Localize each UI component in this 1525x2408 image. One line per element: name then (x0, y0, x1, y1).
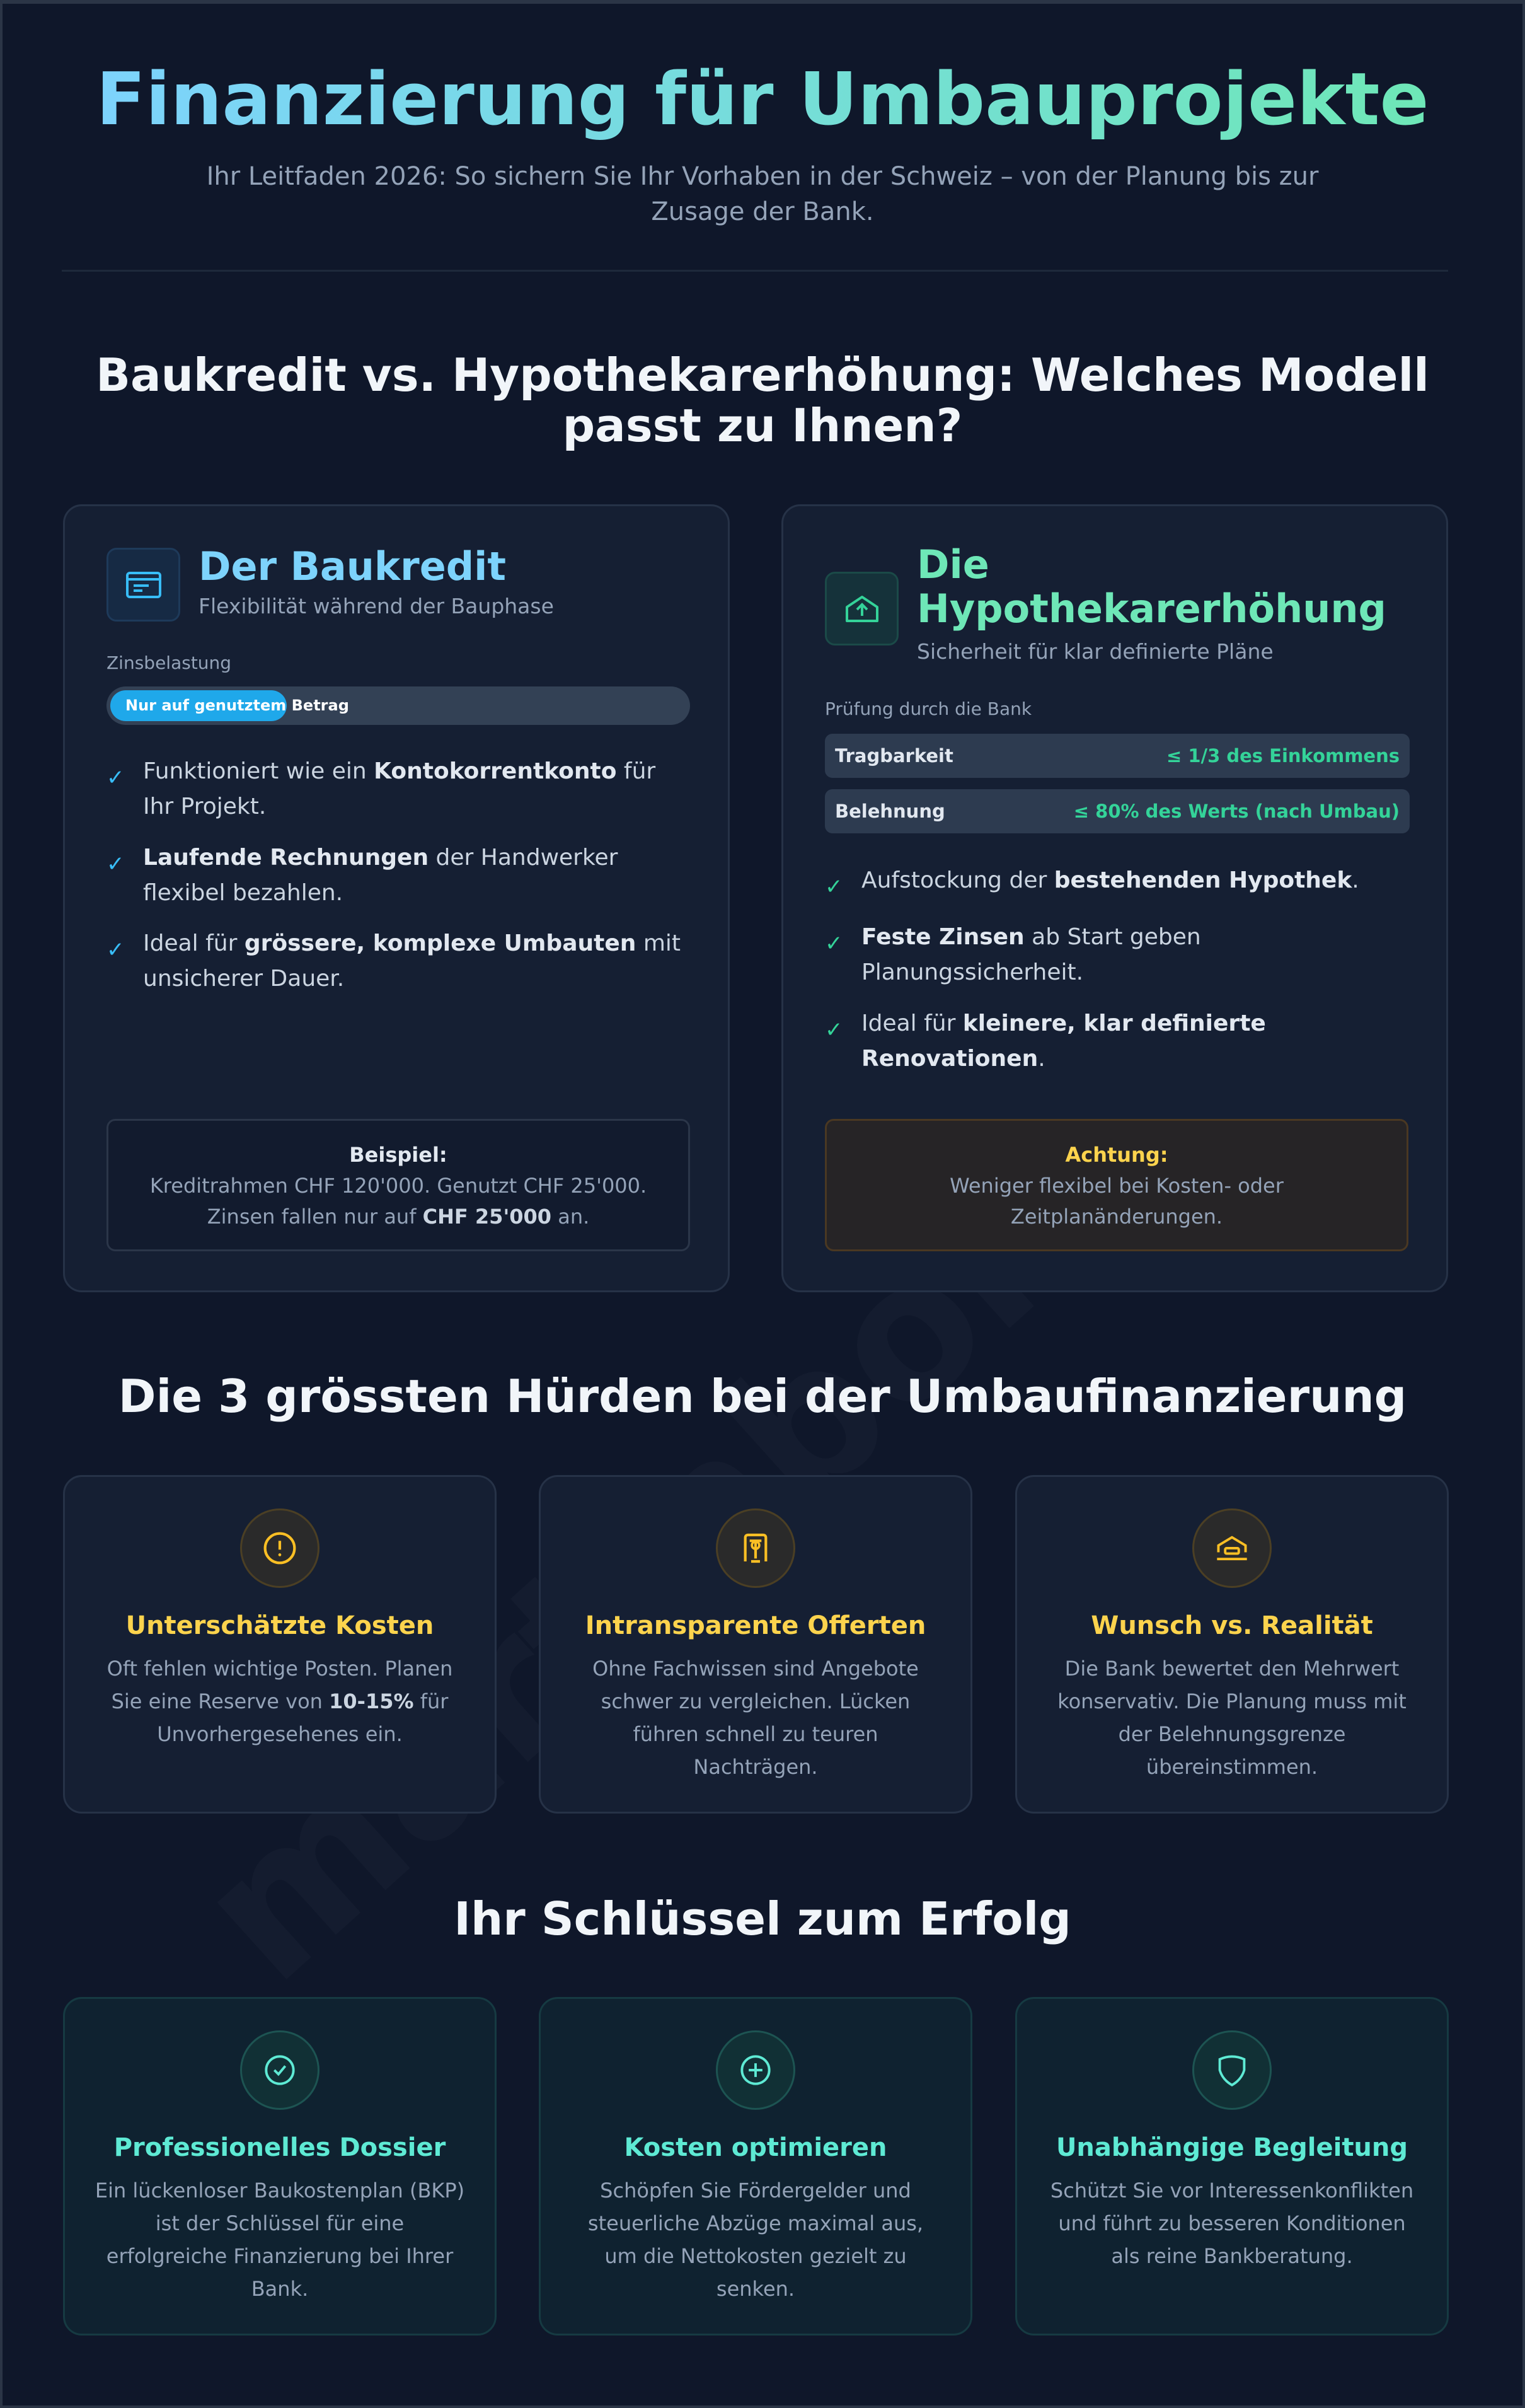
panel: Kosten optimieren: steuerliche Abzüge maximal aus, (588, 2211, 923, 2235)
panel: Wunsch vs. Realität: konservativ. Die Planung muss mit (1057, 1689, 1407, 1713)
panel: Baukredit: Ideal für grössere, komplexe Umbauten mit (143, 930, 681, 956)
panel: Unabhängige Begleitung: Schützt Sie vor Interessenkonflikten (1050, 2179, 1413, 2203)
bullets: Ihr Projekt. (143, 794, 266, 819)
panel: Wunsch vs. Realität: Wunsch vs. Realität (1091, 1611, 1373, 1640)
panel: Baukredit: ✓ (106, 852, 125, 877)
panel: Intransparente Offerten (539, 1475, 972, 1814)
panel: Hypothekarerhöhung: Feste Zinsen ab Start geben (861, 924, 1201, 950)
panel: Hypothekarerhöhung: Prüfung durch die Bank (825, 698, 1032, 719)
panel: Intransparente Offerten: führen schnell zu teuren (633, 1722, 878, 1746)
panel: Baukredit (63, 504, 730, 1292)
panel: Unterschätzte Kosten: Sie eine Reserve von 10-15% für (112, 1689, 448, 1713)
icon: alert (240, 1508, 319, 1588)
panel: Kosten optimieren: Kosten optimieren (624, 2133, 887, 2162)
row: Tragbarkeit (825, 734, 1410, 778)
panel: Professionelles Dossier: Ein lückenloser Baukostenplan (BKP) (95, 2179, 464, 2203)
bullets (106, 758, 655, 819)
bar: Zinsbelastung: Nur auf genutztem Betrag (125, 697, 349, 714)
panel: Unabhängige Begleitung: als reine Bankberatung. (1111, 2244, 1353, 2268)
panel: Hypothekarerhöhung: Planungssicherheit. (861, 959, 1083, 985)
panel: Hypothekarerhöhung: ✓ (825, 874, 843, 900)
callout: Beispiel: Zinsen fallen nur auf CHF 25'000 an. (207, 1205, 589, 1229)
panel: Intransparente Offerten: schwer zu vergleichen. Lücken (601, 1689, 910, 1713)
icon: upload house (825, 572, 899, 645)
panel: Professionelles Dossier: erfolgreiche Finanzierung bei Ihrer (106, 2244, 453, 2268)
row: Belehnung: ≤ 80% des Werts (nach Umbau) (1074, 801, 1400, 822)
icon: house (1192, 1508, 1272, 1588)
subtitle: Ihr Leitfaden 2026: So sichern Sie Ihr Vorhaben in der Schweiz – von der Planung bis zur (207, 162, 1318, 191)
panel: Intransparente Offerten: Ohne Fachwissen sind Angebote (592, 1657, 919, 1681)
heading: Schlüssel: Ihr Schlüssel zum Erfolg (454, 1892, 1071, 1945)
icon: plus circle (716, 2030, 795, 2110)
heading: Die Hypothekarerhöhung: Hypothekarerhöhung (917, 586, 1386, 632)
panel: Hypothekarerhöhung: Ideal für kleinere, klar definierte (861, 1010, 1266, 1036)
panel: Unterschätzte Kosten (63, 1475, 497, 1814)
bullets: Aufstockung der bestehenden Hypothek. (861, 867, 1359, 893)
row: Tragbarkeit: ≤ 1/3 des Einkommens (1166, 745, 1400, 767)
bullets: Funktioniert wie ein Kontokorrentkonto für (143, 758, 655, 784)
panel: Professionelles Dossier: Bank. (251, 2277, 308, 2301)
subtitle (207, 162, 1318, 226)
panel: Unterschätzte Kosten: Oft fehlen wichtige Posten. Planen (107, 1657, 452, 1681)
panel: Baukredit: Flexibilität während der Bauphase (199, 594, 554, 618)
panel: Wunsch vs. Realität: Die Bank bewertet den Mehrwert (1065, 1657, 1399, 1681)
panel: Kosten optimieren: senken. (716, 2277, 795, 2301)
panel: Intransparente Offerten: Intransparente Offerten (585, 1611, 926, 1640)
panel: Intransparente Offerten: Nachträgen. (693, 1755, 818, 1779)
panel: Baukredit: Zinsbelastung (106, 652, 231, 673)
panel: Unabhängige Begleitung (1015, 1997, 1449, 2336)
heading: Der Baukredit: Der Baukredit (199, 543, 506, 589)
panel: Baukredit: ✓ (106, 937, 125, 963)
panel: Wunsch vs. Realität (1015, 1475, 1449, 1814)
heading: comparison: Baukredit vs. Hypothekarerhöhung: Welches Modell (96, 349, 1429, 402)
panel: Hypothekarerhöhung: ✓ (825, 1017, 843, 1043)
bar: Zinsbelastung (106, 686, 690, 725)
title: Finanzierung für Umbauprojekte (96, 57, 1429, 142)
heading: Hürden: Die 3 grössten Hürden bei der Umbaufinanzierung (118, 1370, 1407, 1423)
panel: Kosten optimieren (539, 1997, 972, 2336)
callout: Achtung: Weniger flexibel bei Kosten- oder (950, 1174, 1284, 1198)
panel: Kosten optimieren: Schöpfen Sie Fördergelder und (600, 2179, 911, 2203)
panel: Hypothekarerhöhung: Renovationen. (861, 1046, 1045, 1072)
watermark: martinbone.ch (158, 819, 1459, 2023)
panel: Wunsch vs. Realität: übereinstimmen. (1146, 1755, 1318, 1779)
heading: comparison: passt zu Ihnen? (563, 399, 962, 452)
icon: document (716, 1508, 795, 1588)
panel: Unterschätzte Kosten: Unterschätzte Kosten (126, 1611, 434, 1640)
panel: Hypothekarerhöhung: Sicherheit für klar definierte Pläne (917, 639, 1274, 664)
subtitle: Zusage der Bank. (651, 197, 874, 226)
panel: Baukredit: ✓ (106, 765, 125, 790)
callout: Achtung (825, 1119, 1408, 1251)
panel: Unabhängige Begleitung: und führt zu besseren Konditionen (1058, 2211, 1406, 2235)
panel: Hypothekarerhöhung (781, 504, 1448, 1292)
panel: Professionelles Dossier (63, 1997, 497, 2336)
callout: Beispiel: Kreditrahmen CHF 120'000. Genutzt CHF 25'000. (150, 1174, 647, 1198)
panel: Unabhängige Begleitung: Unabhängige Begleitung (1056, 2133, 1408, 2162)
row: Belehnung: Belehnung (835, 801, 945, 822)
panel: Wunsch vs. Realität: der Belehnungsgrenze (1119, 1722, 1345, 1746)
row: Tragbarkeit: Tragbarkeit (835, 745, 953, 767)
panel: Professionelles Dossier: ist der Schlüssel für eine (156, 2211, 404, 2235)
panel: Hypothekarerhöhung: ✓ (825, 931, 843, 956)
callout: Beispiel (106, 1119, 690, 1251)
heading: comparison (96, 349, 1429, 452)
panel: Baukredit: flexibel bezahlen. (143, 880, 343, 906)
panel: Unterschätzte Kosten: Unvorhergesehenes ein. (157, 1722, 403, 1746)
panel: Kosten optimieren: um die Nettokosten gezielt zu (604, 2244, 907, 2268)
callout: Achtung: Zeitplanänderungen. (1011, 1205, 1223, 1229)
icon: card (106, 548, 180, 622)
heading: Die Hypothekarerhöhung: Die (917, 541, 989, 588)
panel: Baukredit: unsicherer Dauer. (143, 966, 344, 992)
heading: Die Hypothekarerhöhung (917, 541, 1386, 632)
icon: check circle (240, 2030, 319, 2110)
callout: Achtung: Achtung: (1065, 1143, 1168, 1167)
icon: shield (1192, 2030, 1272, 2110)
row: Belehnung (825, 789, 1410, 833)
panel: Professionelles Dossier: Professionelles Dossier (114, 2133, 446, 2162)
panel: Baukredit: Laufende Rechnungen der Handwerker (143, 845, 618, 871)
callout: Beispiel: Beispiel: (349, 1143, 447, 1167)
